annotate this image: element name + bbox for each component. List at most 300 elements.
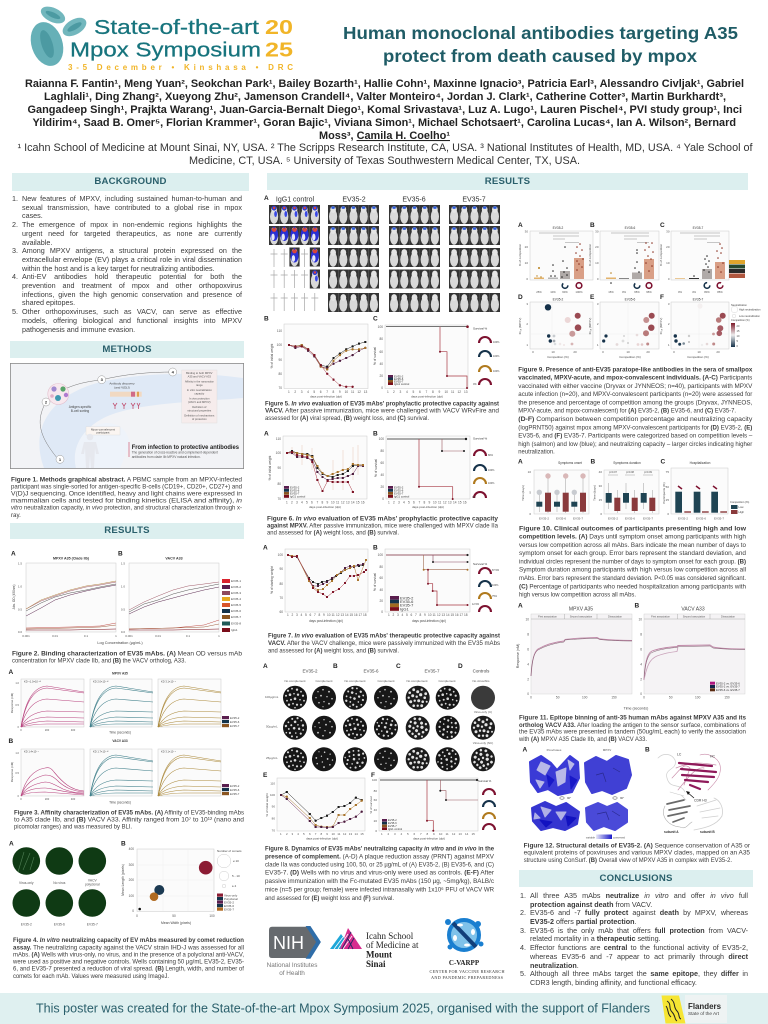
chart A: EV35-2 bbox=[530, 226, 593, 280]
rotation marker: 90° bbox=[620, 796, 624, 800]
background point 1: sexual transmission, have contributed to a global rise in mpox bbox=[22, 203, 242, 212]
affiliations: Medicine, CT, USA. ⁵ University of Texas Southwestern Medical Center, TX, USA. bbox=[189, 155, 580, 167]
figure 8A-D: plaque reduction assay plates: Virus-only (NC) bbox=[473, 741, 493, 745]
chart A: MPXV A35 binding bbox=[12, 556, 117, 638]
figure 8F: survival chart bbox=[369, 772, 496, 840]
figure 5C: survival chart: 20 bbox=[379, 374, 383, 378]
figure 4B: comet bubble chart: B bbox=[121, 840, 126, 848]
background point 5: models, offering biological and functional insights into MPXV bbox=[22, 316, 242, 325]
background point 3: 3. bbox=[12, 246, 18, 255]
caption: figure 4: assay. The neutralizing capacity against the VACV strain IHD-J was assessed for all bbox=[13, 944, 244, 951]
caption: figure 4: were used as positive and negative controls. Wells containing 50 µg/mL EV35-2, EV35- bbox=[12, 959, 244, 966]
row A: MPXV A35: MPXV A35 bbox=[112, 672, 128, 676]
row A: MPXV A35: 200 bbox=[45, 728, 50, 732]
legend: neutralization and competition: Neutralization bbox=[731, 303, 747, 307]
figure 7A: weight chart: 15 bbox=[350, 613, 353, 617]
figure 7B: survival chart: 10 bbox=[428, 613, 432, 617]
figure 5B: weight chart: 3 bbox=[301, 390, 303, 394]
caption: figure 5: assessed for (A) viral spread, (B) weight loss, and (C) survival. bbox=[265, 415, 429, 422]
figure 7B: survival chart: 8 bbox=[420, 613, 422, 617]
figure 8A-D: plaque reduction assay plates: No complement bbox=[406, 679, 428, 683]
figure 5B: weight chart: 9 bbox=[339, 390, 341, 394]
figure 11B: epitope binning VACV A33: Second association bbox=[683, 614, 706, 618]
caption: figure 9 bbox=[518, 366, 753, 456]
participant figure: Mpox-convalescent bbox=[91, 427, 115, 431]
figure 7A: weight chart: 70 bbox=[279, 596, 283, 600]
legend: EV35 mAbs: EV35-6 bbox=[231, 609, 241, 613]
figure 11A: epitope binning MPXV A35: 50 bbox=[556, 696, 560, 700]
survival arches bbox=[472, 436, 495, 499]
row B: VACV A33 bbox=[10, 739, 240, 804]
legend: EV35 mAbs: EV35-7 bbox=[231, 615, 241, 619]
figure 9D-F: competition versus neutralization bubble plots: 3 bbox=[526, 302, 528, 306]
row B: VACV A33: 0 bbox=[20, 797, 22, 801]
legend: number of comets bbox=[217, 849, 242, 912]
background point 1: New features of MPXV, including sustained human-to-human and bbox=[22, 194, 242, 203]
caption: figure 1: mammalian cells and tested for binding kinetics (ELISA and affinity), in bbox=[11, 498, 243, 505]
figure 7A: weight chart: 10 bbox=[327, 613, 331, 617]
figure 8A-D: plaque reduction assay plates: 100µg/mL bbox=[265, 695, 279, 699]
EV35-6 mice bbox=[389, 205, 440, 312]
figure 7B: survival chart: 80 bbox=[379, 565, 383, 569]
step markers: 4 bbox=[172, 370, 175, 374]
figure 7B: survival chart: 6 bbox=[410, 613, 412, 617]
survival arches bbox=[473, 326, 500, 386]
figure 7A: weight chart: 8 bbox=[318, 613, 320, 617]
figure 5C: survival chart: 6 bbox=[419, 390, 421, 394]
background point 5 bbox=[12, 307, 242, 334]
legend: mAb pairs: EV35-2 vs. EV35-7 bbox=[716, 685, 740, 689]
figure 11B: epitope binning VACV A33: Dissociation bbox=[721, 614, 736, 618]
caption: figure 10: mAbs. Error bars represent the standard deviation. P<0.05 was considered significant. bbox=[519, 575, 746, 582]
figure 5C: survival chart: 11 bbox=[451, 390, 455, 394]
figure 8F: survival chart: 60 bbox=[374, 798, 377, 802]
caption: figure 7 bbox=[268, 633, 500, 654]
list of characterisation steps: range bbox=[196, 383, 203, 387]
IgG1 control mice bbox=[269, 205, 320, 311]
figure 8E: weight chart: 14 bbox=[354, 832, 358, 836]
survival arches: 100% bbox=[488, 469, 495, 472]
figure 11A: epitope binning MPXV A35: 8 bbox=[527, 632, 529, 636]
row B: VACV A33: Response (nM) bbox=[10, 762, 14, 782]
figure 7A: weight chart: 3 bbox=[296, 613, 298, 617]
background point 5: 5. bbox=[12, 307, 18, 316]
figure 6B: survival chart: 16 bbox=[463, 500, 467, 504]
figure 10C: hospitalization bar chart bbox=[661, 456, 755, 522]
figure 11A: epitope binning MPXV A35: 2 bbox=[527, 678, 529, 682]
figure 9D-F: competition versus neutralization bubble plots: F bbox=[660, 294, 664, 301]
figure 10B: symptoms duration box plot: 40 bbox=[599, 470, 602, 474]
list of characterisation steps: Definition of mechanisms bbox=[184, 414, 215, 418]
figure 7B: survival chart: 16 bbox=[455, 613, 459, 617]
list of characterisation steps: Definition of bbox=[192, 405, 207, 409]
figure 11B: epitope binning VACV A33: 10 bbox=[638, 618, 642, 622]
chart B: VACV A33 binding bbox=[121, 556, 220, 638]
legend: number of comets: Number of comets bbox=[217, 849, 242, 853]
background point 4: Anti-EV antibodies hold therapeutic potential for both the bbox=[22, 272, 242, 281]
caption: figure 12: equivalent proteins of poxviruses and various MPXV clades, mapped on an A35 bbox=[524, 850, 751, 857]
list of characterisation steps: structural properties bbox=[187, 408, 212, 412]
legend: EV35 mAbs: EV35-3 bbox=[231, 591, 241, 595]
row B: VACV A33: 400 bbox=[71, 797, 76, 801]
figure 8F: survival chart: 9 bbox=[433, 832, 435, 836]
figure 6B: survival chart: B bbox=[373, 430, 378, 438]
figure 10A: symptoms onset box plot: EV35-7 bbox=[573, 516, 583, 520]
survival arches: 0% bbox=[473, 383, 477, 386]
authors: Moss³, Camila H. Coelho¹ bbox=[319, 130, 450, 142]
figure 4A: comet wells: A bbox=[9, 840, 14, 848]
heading: methods: METHODS bbox=[102, 344, 152, 355]
chart A: MPXV A35 binding: 1.5 bbox=[18, 562, 22, 566]
conclusion 4: neutralization. bbox=[530, 961, 579, 970]
caption: figure 10 bbox=[519, 524, 747, 597]
figure 6A: weight chart bbox=[264, 430, 368, 509]
figure 6A: weight chart: 3 bbox=[296, 500, 298, 504]
legend: number of comets: EV35-2 bbox=[224, 900, 234, 904]
legend bbox=[284, 486, 306, 498]
caption: figure 10: high versus low competition across all mAbs. bbox=[519, 591, 636, 598]
legend: EV35 mAbs bbox=[222, 579, 241, 632]
caption: figure 9: Figure 9. Presence of anti-EV35 paratope-like antibodies in the sera of smallpox bbox=[518, 366, 753, 373]
figure 11A: epitope binning MPXV A35: 10 bbox=[525, 618, 529, 622]
donuts and percentages: 25% bbox=[536, 290, 542, 294]
conclusion 1: protection against death from VACV. bbox=[530, 900, 652, 909]
figure 6B: survival chart: 9 bbox=[428, 500, 430, 504]
background point 5: pathogenesis and immune evasion. bbox=[22, 325, 135, 334]
figure 6B: survival chart: 100 bbox=[379, 437, 384, 441]
survival arches: 87.5% bbox=[492, 569, 500, 572]
antibody discovery: (and V(D)J) bbox=[114, 386, 130, 390]
donuts and percentages: 80% bbox=[704, 290, 710, 294]
chart A: MPXV A35 binding: 1 bbox=[115, 634, 117, 638]
chart B: VACV A33 binding: 0.1 bbox=[186, 634, 190, 638]
caption: figure 9: neutralization. bbox=[518, 449, 555, 456]
figure 6B: survival chart: days post-infection (dpi) bbox=[412, 505, 444, 509]
chart A: EV35-2: EV35-2 bbox=[553, 226, 564, 230]
caption: figure 8: and assessed for (E) weight loss and (F) survival. bbox=[265, 895, 394, 902]
figure 11B: epitope binning VACV A33: 100 bbox=[695, 696, 701, 700]
caption: figure 10: (C) Percentage of participants who needed hospitalization among participants with bbox=[519, 583, 747, 590]
figure 8E: weight chart: 3 bbox=[292, 832, 294, 836]
figure 12A: conservation surfaces: A bbox=[522, 746, 528, 754]
caption: figure 9: acute infection (n=20), and MPXV-convalescent participants (n=20) were assessed for bbox=[518, 391, 753, 398]
figure 6B: survival chart: 15 bbox=[458, 500, 462, 504]
caption: figure 6: and assessed for (A) weight loss, and (B) survival. bbox=[267, 529, 399, 536]
figure 9D-F: competition versus neutralization bubble plots: IC₅₀ (MPXV) bbox=[518, 318, 522, 334]
figure 4B: comet bubble chart: 0 bbox=[136, 914, 138, 918]
legend: EV35-2, -6, -7: EV35-6 bbox=[230, 720, 240, 724]
figure 7B: survival chart: % of survival bbox=[373, 573, 377, 591]
figure 11A: epitope binning MPXV A35 bbox=[515, 601, 633, 711]
figure 9D-F: competition versus neutralization bubble plots: 0 bbox=[602, 350, 604, 354]
figure 5B: weight chart: 6 bbox=[320, 390, 322, 394]
chart B: EV35-6 bbox=[600, 226, 659, 284]
participant figure: participant bbox=[97, 430, 110, 434]
caption: figure 3: Figure 3. Affinity characterization of EV35 mAbs. (A) Affinity of EV35-binding mAbs bbox=[14, 810, 244, 817]
figure 8E: weight chart: 1 bbox=[280, 832, 282, 836]
figure 8A-D: plaque reduction assay plates: D bbox=[458, 663, 463, 670]
figure 9D-F: competition versus neutralization bubble plots bbox=[518, 294, 761, 359]
figure 1: methods graphical abstract bbox=[10, 363, 244, 469]
conclusion 5 bbox=[520, 970, 748, 988]
legend bbox=[388, 486, 410, 498]
donuts and percentages: 0% bbox=[678, 290, 683, 294]
figure 6A: weight chart: 15 bbox=[356, 500, 360, 504]
survival arches: 100% bbox=[493, 341, 500, 344]
heading: results centre and right: RESULTS bbox=[485, 176, 530, 187]
caption: figure 10: individual circles represent the number of days to symptom onset for each group. (B) bbox=[519, 558, 746, 565]
figure 4A: comet wells: No virus bbox=[53, 881, 66, 885]
figure 7B: survival chart: 11 bbox=[432, 613, 436, 617]
figure 9D-F: competition versus neutralization bubble plots: Competition (%) bbox=[547, 355, 569, 359]
figure 5B: weight chart: 4 bbox=[307, 390, 309, 394]
figure 8E: weight chart: 80 bbox=[272, 817, 275, 821]
legend: mAb pairs bbox=[710, 681, 740, 692]
figure 2: binding characterization charts bbox=[11, 550, 241, 645]
figure 5B: weight chart: days post-infection (dpi) bbox=[310, 394, 342, 398]
figure 7B: survival chart: 7 bbox=[415, 613, 417, 617]
figure 5B: weight chart: B bbox=[264, 316, 269, 322]
figure 10A: symptoms onset box plot: Time (days) bbox=[521, 485, 525, 501]
figure 7A: weight chart: 1 bbox=[287, 613, 289, 617]
caption: figure 1: vitro neutralization capacity, in vivo protection, and structural characterization through x- bbox=[11, 505, 242, 512]
caption: figure 11: with (A) MPXV A35 Clade IIb, and (B) VACV A33. bbox=[518, 736, 647, 743]
legend: EV35-2 bbox=[388, 818, 397, 822]
legend: competition: Competition (%) bbox=[730, 500, 749, 504]
caption: figure 12: structure using ConSurf. (B) Overall view of MPXV A35 in complex with EV35-2. bbox=[524, 857, 732, 864]
figure 5C: survival chart: 12 bbox=[458, 390, 461, 394]
figure 6A: weight chart: 16 bbox=[361, 500, 365, 504]
figure 8A-D: plaque reduction assay plates: A bbox=[263, 663, 268, 670]
legend: EV35-2 bbox=[400, 596, 414, 600]
row A: MPXV A35: Time (seconds) bbox=[109, 730, 131, 734]
figure 8E: weight chart: 8 bbox=[320, 832, 322, 836]
legend: mAb pairs: EV35-2 vs. EV35-6 bbox=[716, 681, 740, 685]
legend: EV35-6 bbox=[290, 488, 300, 492]
figure 9D-F: competition versus neutralization bubble plots: 2 bbox=[668, 322, 670, 326]
conclusion 1: All three A35 mAbs neutralize in vitro and offer in vivo full bbox=[530, 891, 748, 900]
figure 10C: hospitalization bar chart: 75 bbox=[666, 470, 669, 474]
legend: neutralization and competition: 20 bbox=[736, 324, 740, 328]
row B: VACV A33: 0 bbox=[18, 794, 20, 798]
figure 5C: survival chart: 8 bbox=[432, 390, 434, 394]
figure 12B: complex structure ribbon: LC bbox=[677, 752, 682, 756]
figure 12B: complex structure ribbon: B bbox=[645, 746, 650, 754]
figure 6B: survival chart: 6 bbox=[413, 500, 415, 504]
logo wording: Mpox Symposium bbox=[70, 40, 261, 62]
figure 8F: survival chart: 11 bbox=[446, 832, 449, 836]
legend: EV35-2, -6, -7: EV35-2 bbox=[230, 716, 240, 720]
figure 5B: weight chart: 7 bbox=[326, 390, 328, 394]
figure 11B: epitope binning VACV A33: 150 bbox=[724, 696, 730, 700]
donuts and percentages bbox=[536, 283, 723, 294]
surface: MPXV top bbox=[585, 756, 631, 794]
figure 9D-F: competition versus neutralization bubble plots: 3 bbox=[668, 302, 670, 306]
background point 5: Other orthopoxviruses, such as VACV, can serve as effective bbox=[22, 307, 242, 316]
figure 7B: survival chart: 13 bbox=[442, 613, 445, 617]
conclusion 5: CDR3 length, binding affinity, and functional efficacy. bbox=[530, 978, 697, 987]
survival arches: Survival % bbox=[473, 562, 488, 566]
plot F: EV35-7 bbox=[671, 298, 729, 349]
figure 9D-F: competition versus neutralization bubble plots: Competition (%) bbox=[619, 355, 641, 359]
survival legend: EV35-6 bbox=[394, 377, 404, 381]
figure 9D-F: competition versus neutralization bubble plots: 2 bbox=[597, 322, 599, 326]
logo: NIH: NIH bbox=[273, 933, 304, 953]
figure 10C: hospitalization bar chart: EV35-6 bbox=[696, 516, 706, 520]
caption: figure 6: against MPXV. After passive immunization, mice were challenged with MPXV clade IIa bbox=[267, 522, 499, 529]
figure 4A: comet wells: EV35-6 bbox=[54, 922, 65, 926]
title: Human monoclonal antibodies targeting A35 bbox=[343, 23, 738, 43]
figure 10C: hospitalization bar chart: C bbox=[660, 458, 666, 466]
figure 6A: weight chart: 1 bbox=[286, 500, 288, 504]
caption: figure 7: VACV. After the VACV challenge, mice were passively immunized with the EV35 mAbs bbox=[268, 640, 500, 647]
figure 10A: symptoms onset box plot bbox=[518, 458, 590, 520]
caption: figure 4: Figure 4. In vitro neutralizing capacity of EV mAbs measured by comet reduction bbox=[13, 937, 244, 944]
figure 10B: symptoms duration box plot: p=0.07 bbox=[609, 471, 617, 474]
figure 6B: survival chart: 14 bbox=[453, 500, 457, 504]
icon: triangles bbox=[330, 928, 362, 949]
survival arches: Survival % bbox=[473, 436, 488, 440]
B-cell sorting bbox=[48, 384, 92, 413]
surface: poxviruses top bbox=[530, 756, 579, 795]
figure 4B: comet bubble chart: 100 bbox=[129, 894, 134, 898]
legend: EV35-7 bbox=[388, 824, 397, 828]
panel: background list bbox=[12, 194, 242, 334]
figure 4B: comet bubble chart: Mean Width (pixels) bbox=[161, 921, 191, 925]
figure 9D-F: competition versus neutralization bubble plots: 10 bbox=[697, 350, 701, 354]
legend: number of comets: Virus-only bbox=[224, 894, 238, 898]
caption: figure 12 bbox=[523, 841, 751, 863]
legend: number of comets: 5 - 10 bbox=[232, 874, 240, 878]
caption: figure 1: Figure 1. Methods graphical abstract. A PBMC sample from an MPXV-infected bbox=[11, 476, 243, 483]
figure 5C: survival chart: 10 bbox=[444, 390, 448, 394]
panel: conclusions list bbox=[520, 892, 748, 988]
caption: figure 12: Figure 12. Structural details of EV35-2. (A) Sequence conservation of A35 or bbox=[524, 843, 750, 850]
list of characterisation steps: Binding to both MPXV bbox=[186, 371, 213, 375]
chart B: VACV A33 binding: 0.0 bbox=[121, 630, 125, 634]
figure 5C: survival chart bbox=[373, 316, 500, 398]
figure 9A-C: competition bar charts: % of competition bbox=[518, 244, 522, 266]
caption: figure 4: mAbs. (A) Wells with virus-only, no virus, and in the presence of a polyclonal anti-VACV, bbox=[13, 951, 244, 958]
figure 7A: weight chart: 12 bbox=[336, 613, 340, 617]
figure 7A: weight chart: 5 bbox=[305, 613, 307, 617]
figure 10B: symptoms duration box plot bbox=[591, 456, 661, 522]
figure 8E: weight chart: 110 bbox=[270, 781, 275, 785]
caption: figure 7: and assessed for (A) weight loss, and (B) survival. bbox=[268, 647, 399, 654]
figure 6A: weight chart: 7 bbox=[316, 500, 318, 504]
figure 7A: weight chart: 4 bbox=[300, 613, 302, 617]
caption: figure 3 bbox=[14, 810, 245, 831]
row A: MPXV A35: 0 bbox=[18, 725, 20, 729]
caption: figure 9: high (salmon) and low (blue); and neutralizing capacity – larger circles indicating higher bbox=[518, 441, 753, 448]
figure 4B: comet bubble chart: 200 bbox=[129, 878, 134, 882]
figure 9A-C: competition bar charts: 20 bbox=[595, 245, 599, 249]
figure 7A: weight chart: 17 bbox=[358, 613, 362, 617]
chart C: EV35-7 bbox=[671, 226, 729, 280]
message: from infection to protective antibodies: The generation of cross-reactive and complement-dependent bbox=[132, 450, 218, 454]
figure 6A: weight chart: 12 bbox=[341, 500, 345, 504]
chart B: VACV A33 binding: 0.01 bbox=[155, 634, 161, 638]
figure 2: binding characterization charts: A bbox=[11, 550, 16, 558]
figure 6B: survival chart: 5 bbox=[408, 500, 410, 504]
figure 5B: weight chart: 8 bbox=[332, 390, 334, 394]
surface: poxviruses bottom bbox=[532, 802, 579, 830]
figure 8A-D: plaque reduction assay plates: EV35-7 bbox=[424, 668, 440, 674]
B-cell sorting: Antigen-specific bbox=[69, 405, 92, 409]
footer band bbox=[0, 993, 768, 1024]
figure 6A: weight chart: 8 bbox=[322, 500, 324, 504]
logo: Icahn School of Medicine at Mount Sinai bbox=[330, 928, 419, 969]
figure 5C: survival chart: 5 bbox=[412, 390, 414, 394]
legend: neutralization and competition: High neutralization bbox=[739, 308, 761, 312]
list of characterisation steps: capacity bbox=[194, 391, 205, 395]
figure 8E: weight chart bbox=[263, 772, 366, 840]
figure 8F: survival chart: 0 bbox=[375, 829, 377, 833]
row A: MPXV A35: 400 bbox=[71, 728, 76, 732]
survival arches: 80% bbox=[488, 454, 494, 457]
plot F: EV35-7: EV35-7 bbox=[693, 298, 704, 302]
background point 2 bbox=[12, 220, 242, 247]
logo: Flanders bbox=[660, 994, 728, 1024]
donuts and percentages: 10% bbox=[550, 290, 556, 294]
chart A: MPXV A35 binding: 0.1 bbox=[84, 634, 88, 638]
figure 10B: symptoms duration box plot: B bbox=[590, 458, 596, 466]
figure 8E: weight chart: 10 bbox=[332, 832, 335, 836]
caption: figure 7: Figure 7. In vivo evaluation of EV35 mAbs' therapeutic protective capacity against bbox=[268, 633, 500, 640]
figure 7B: survival chart: 4 bbox=[402, 613, 404, 617]
plot E: EV35-6 bbox=[600, 298, 659, 349]
background point 1 bbox=[12, 194, 242, 220]
figure 5B: weight chart: 13 bbox=[364, 390, 367, 394]
figure 7B: survival chart: 60 bbox=[379, 576, 383, 580]
caption: figure 5 bbox=[265, 400, 500, 422]
figure 12A: conservation surfaces: Poxviruses bbox=[547, 748, 562, 752]
figure 4A: comet wells: Virus-only bbox=[19, 881, 34, 885]
figure 8E: weight chart: 70 bbox=[272, 829, 275, 833]
icon: virus capsules bbox=[25, 3, 90, 70]
figure 6A: weight chart: 11 bbox=[336, 500, 340, 504]
figure 6A: weight chart: A bbox=[264, 430, 269, 438]
logo wording: State-of-the-art bbox=[94, 17, 260, 39]
figure 9A-C: competition bar charts: 10 bbox=[595, 261, 599, 265]
figure 11A: epitope binning MPXV A35: A bbox=[518, 602, 523, 610]
figure 5B: weight chart: 100 bbox=[277, 343, 282, 347]
logo: Icahn School of Medicine at Mount Sinai: Icahn School bbox=[366, 931, 414, 941]
figure 9D-F: competition versus neutralization bubble plots: IC₅₀ (MPXV) bbox=[659, 318, 663, 334]
figure 6A: weight chart: 9 bbox=[326, 500, 328, 504]
conclusion 4: Effector functions are central to the functional activity of EV35-2, bbox=[530, 943, 748, 952]
figure 11A: epitope binning MPXV A35: First association bbox=[538, 614, 557, 618]
figure 11A: epitope binning MPXV A35: 150 bbox=[611, 696, 617, 700]
figure 8E: weight chart: 13 bbox=[349, 832, 352, 836]
survival arches: Survival % bbox=[478, 779, 492, 783]
figure 11B: epitope binning VACV A33: 4 bbox=[640, 662, 642, 666]
figure 9A-C: competition bar charts: 10 bbox=[666, 261, 670, 265]
figure 7A: weight chart: 13 bbox=[340, 613, 344, 617]
figure 4A: comet wells: EV35-2 bbox=[21, 922, 32, 926]
figure 2: binding characterization charts: Log Concentration (µg/mL) bbox=[97, 641, 143, 645]
figure 10B: symptoms duration box plot: 30 bbox=[599, 484, 602, 488]
authors: Raianna F. Fantin¹, Meng Yuan², Seokchan Park¹, Bailey Bozarth¹, Hallie Cohn¹, Maxinne Ignacio³, Patricia Earl³, Alessandro Civljak¹, Gabriel bbox=[25, 78, 744, 90]
logo: Flanders: State of the Art bbox=[688, 1011, 720, 1016]
survival arches: 0% bbox=[472, 496, 476, 499]
figure 9A-C: competition bar charts: 30 bbox=[595, 230, 599, 234]
figure 5C: survival chart: 80 bbox=[379, 337, 383, 341]
figure 10C: hospitalization bar chart: EV35-2 bbox=[678, 516, 688, 520]
step markers: 2 bbox=[45, 400, 48, 404]
row B: VACV A33: Time (seconds) bbox=[109, 800, 131, 804]
caption: figure 2: Figure 2. Binding characterization of EV35 mAbs. (A) Mean OD versus mAb bbox=[12, 650, 243, 657]
